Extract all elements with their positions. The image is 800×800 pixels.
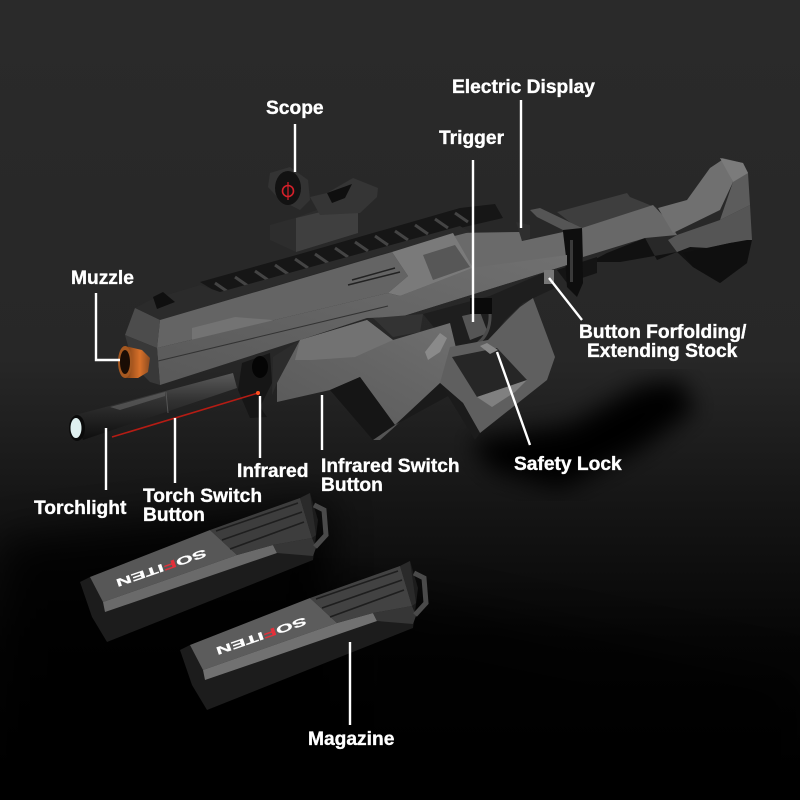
label: Electric Display: Electric Display (452, 77, 595, 98)
torch (69, 373, 237, 441)
front sight (153, 292, 175, 309)
label: Muzzle: Muzzle (71, 268, 134, 289)
scope (268, 167, 378, 252)
label: Infrared Switch Button: Button (321, 475, 383, 496)
fore grip (277, 320, 463, 425)
slide front face (125, 335, 160, 385)
label: Button For folding / Extending Stock: Button Forfolding/ (579, 322, 747, 343)
magazine 2 logo: SOFITEN (214, 614, 308, 656)
lower receiver (423, 273, 557, 347)
label: Safety Lock: Safety Lock (514, 454, 622, 475)
slide lower (157, 255, 567, 385)
slide window (388, 233, 473, 296)
stock button (544, 270, 554, 284)
gun (69, 158, 752, 441)
laser (112, 393, 258, 437)
infrared unit (238, 353, 272, 418)
label: Infrared Switch Button: Infrared Switch (321, 456, 460, 477)
grip (440, 298, 555, 440)
muzzle (118, 346, 150, 378)
label: Torch Switch Button: Button (143, 505, 205, 526)
leader lines (96, 100, 582, 725)
rear receiver (380, 232, 567, 317)
label: Scope: Scope (266, 98, 324, 119)
lever (425, 333, 447, 360)
magazine 1 logo: SOFITEN (114, 546, 208, 588)
label: Torch Switch Button (143, 486, 262, 526)
magazine 1 (80, 493, 326, 642)
label: Infrared: Infrared (237, 461, 308, 482)
stock (557, 158, 752, 283)
stock hinge (530, 208, 583, 297)
rail (200, 204, 503, 294)
dark strip above grip (373, 314, 423, 337)
slide top (135, 226, 470, 320)
label: Infrared Switch Button (321, 456, 460, 496)
magazine 2 (180, 561, 426, 710)
label: Button For folding / Extending Stock: Extending Stock (587, 341, 738, 362)
label: Torchlight: Torchlight (34, 498, 127, 519)
label: Button For folding / Extending Stock (579, 322, 747, 362)
label: Trigger: Trigger (439, 128, 505, 149)
label: Magazine: Magazine (308, 729, 395, 750)
floor shadow (0, 380, 800, 800)
label: Torch Switch Button: Torch Switch (143, 486, 262, 507)
trigger area (452, 298, 492, 352)
